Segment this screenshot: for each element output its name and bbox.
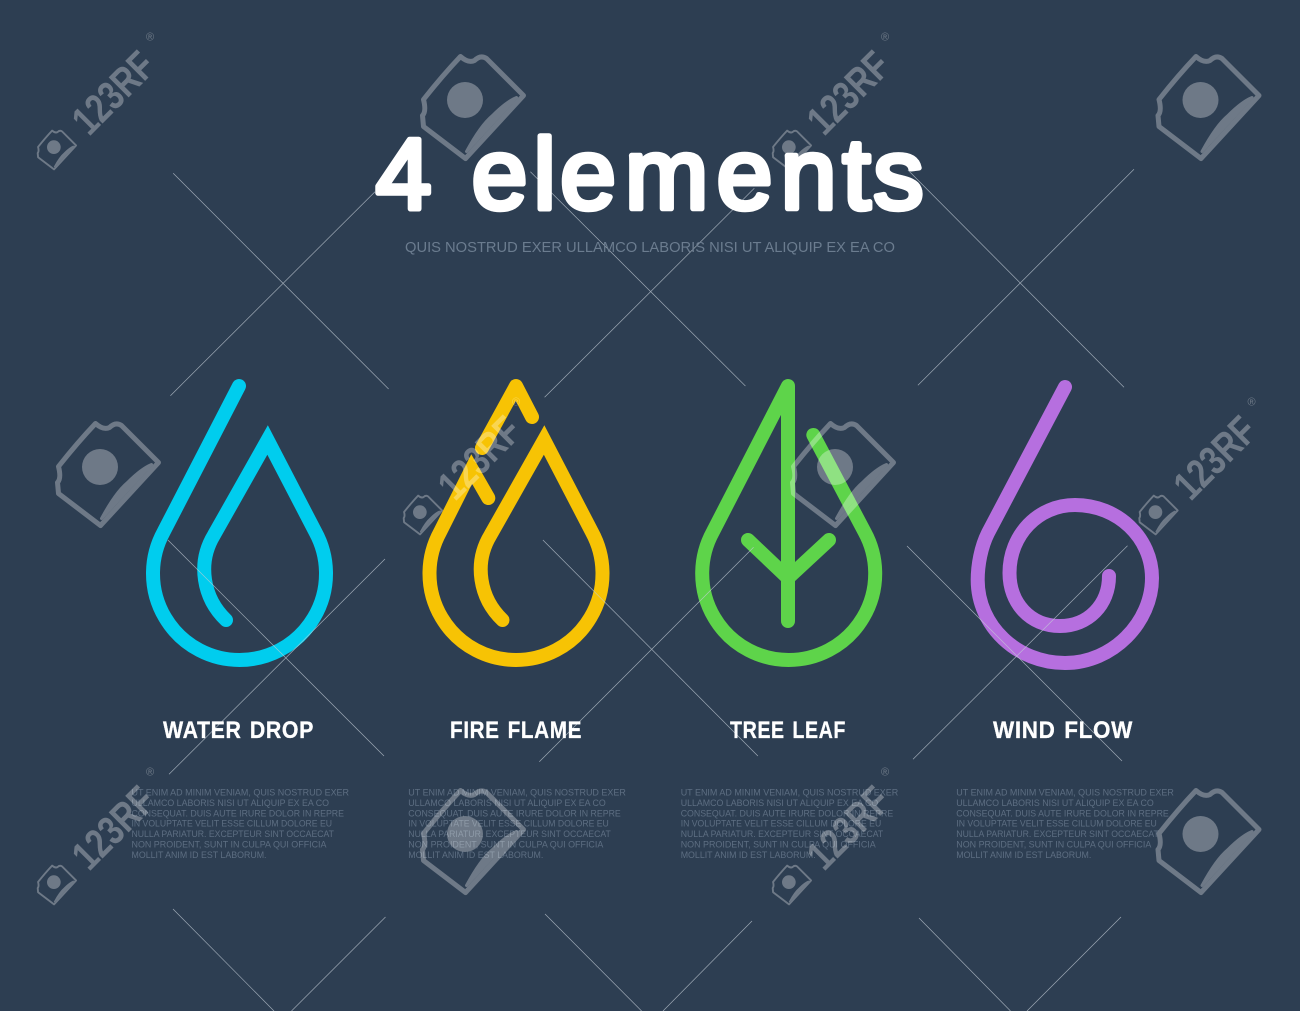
leaf outline and stem <box>702 386 875 660</box>
watermark: bottom left: ® <box>146 766 154 778</box>
subtitle: QUIS NOSTRUD EXER ULLAMCO LABORIS NISI UT ALIQUIP EX EA CO <box>405 240 895 256</box>
text block: water drop description <box>132 786 349 860</box>
watermark: middle right: ® <box>1248 396 1256 408</box>
text block: fire flame description: MOLLIT ANIM ID EST LABORUM. <box>408 849 543 860</box>
text block: tree leaf description: UT ENIM AD MINIM VENIAM, QUIS NOSTRUD EXER <box>681 786 898 798</box>
watermark: top centre: ® <box>881 32 889 44</box>
text block: water drop description: UT ENIM AD MINIM VENIAM, QUIS NOSTRUD EXER <box>132 786 349 798</box>
flame upper tip <box>482 386 532 448</box>
text block: tree leaf description: ULLAMCO LABORIS NISI UT ALIQUIP EX EA CO <box>681 797 878 808</box>
icon: tree leaf <box>702 386 875 660</box>
text block: wind flow description: MOLLIT ANIM ID EST LABORUM. <box>956 849 1091 860</box>
text block: fire flame description: NON PROIDENT, SUNT IN CULPA QUI OFFICIA <box>408 838 604 849</box>
watermark: top centre: 123RF <box>798 42 899 143</box>
icon: fire flame <box>430 386 602 660</box>
watermark camera: top right <box>1158 56 1259 158</box>
text block: water drop description: CONSEQUAT. DUIS AUTE IRURE DOLOR IN REPRE <box>132 807 344 818</box>
text block: wind flow description: UT ENIM AD MINIM VENIAM, QUIS NOSTRUD EXER <box>956 786 1174 798</box>
watermark: bottom centre: ® <box>881 766 889 778</box>
text block: water drop description: ULLAMCO LABORIS NISI UT ALIQUIP EX EA CO <box>132 797 329 808</box>
text block: tree leaf description <box>681 786 898 860</box>
watermark: middle right <box>1139 396 1266 534</box>
watermark camera: bottom right <box>1158 790 1259 892</box>
watermark: bottom left <box>38 766 164 904</box>
text block: wind flow description: NULLA PARIATUR. EXCEPTEUR SINT OCCAECAT <box>956 828 1159 839</box>
text block: fire flame description: NULLA PARIATUR. EXCEPTEUR SINT OCCAECAT <box>408 828 611 839</box>
text block: tree leaf description: MOLLIT ANIM ID EST LABORUM. <box>681 849 816 860</box>
text block: water drop description: IN VOLUPTATE VELIT ESSE CILLUM DOLORE EU <box>132 818 332 829</box>
text block: tree leaf description: CONSEQUAT. DUIS AUTE IRURE DOLOR IN REPRE <box>681 807 893 818</box>
text block: water drop description: MOLLIT ANIM ID EST LABORUM. <box>132 849 266 860</box>
watermark: middle left-centre: ® <box>512 396 520 408</box>
label: water drop: WATER DROP <box>163 717 314 744</box>
text block: wind flow description: CONSEQUAT. DUIS AUTE IRURE DOLOR IN REPRE <box>956 807 1169 818</box>
watermark: top left: 123RF <box>63 42 164 143</box>
watermark: bottom centre: 123RF <box>798 777 899 878</box>
label: tree leaf: TREE LEAF <box>730 717 846 744</box>
label: fire flame: FIRE FLAME <box>450 717 582 744</box>
watermark: bottom centre <box>773 766 899 904</box>
leaf veins <box>748 540 829 578</box>
flame outer body <box>430 440 602 660</box>
watermark: middle right: 123RF <box>1164 407 1266 508</box>
icon: water drop <box>153 386 326 660</box>
icon: wind flow <box>978 387 1152 663</box>
watermark: bottom left: 123RF <box>63 777 164 878</box>
thin diagonal guide lines <box>168 169 1134 1011</box>
watermark camera: middle left <box>58 424 158 526</box>
watermark: middle left-centre <box>404 396 530 534</box>
text block: fire flame description: IN VOLUPTATE VELIT ESSE CILLUM DOLORE EU <box>408 818 609 829</box>
text block: tree leaf description: IN VOLUPTATE VELIT ESSE CILLUM DOLORE EU <box>681 818 881 829</box>
text block: wind flow description <box>956 786 1174 860</box>
watermark: top left: ® <box>146 32 154 44</box>
text block: fire flame description <box>408 786 626 860</box>
watermark camera: top centre-left <box>422 56 524 158</box>
watermark: middle left-centre: 123RF <box>429 407 530 508</box>
text block: water drop description: NULLA PARIATUR. EXCEPTEUR SINT OCCAECAT <box>132 828 334 839</box>
watermark camera: bottom centre-left <box>422 790 524 892</box>
text block: water drop description: NON PROIDENT, SUNT IN CULPA QUI OFFICIA <box>132 838 327 849</box>
text block: fire flame description: ULLAMCO LABORIS NISI UT ALIQUIP EX EA CO <box>408 797 606 808</box>
text block: tree leaf description: NULLA PARIATUR. EXCEPTEUR SINT OCCAECAT <box>681 828 883 839</box>
text block: fire flame description: CONSEQUAT. DUIS AUTE IRURE DOLOR IN REPRE <box>408 807 621 818</box>
watermark camera: middle centre <box>792 424 894 526</box>
text block: wind flow description: ULLAMCO LABORIS NISI UT ALIQUIP EX EA CO <box>956 797 1154 808</box>
text block: fire flame description: UT ENIM AD MINIM VENIAM, QUIS NOSTRUD EXER <box>408 786 626 798</box>
text block: wind flow description: IN VOLUPTATE VELIT ESSE CILLUM DOLORE EU <box>956 818 1157 829</box>
text block: tree leaf description: NON PROIDENT, SUNT IN CULPA QUI OFFICIA <box>681 838 876 849</box>
title: 4 elements <box>376 118 924 230</box>
watermark: top left <box>38 32 164 169</box>
text block: wind flow description: NON PROIDENT, SUNT IN CULPA QUI OFFICIA <box>956 838 1152 849</box>
label: wind flow: WIND FLOW <box>993 717 1133 744</box>
watermark: top centre <box>773 32 899 169</box>
